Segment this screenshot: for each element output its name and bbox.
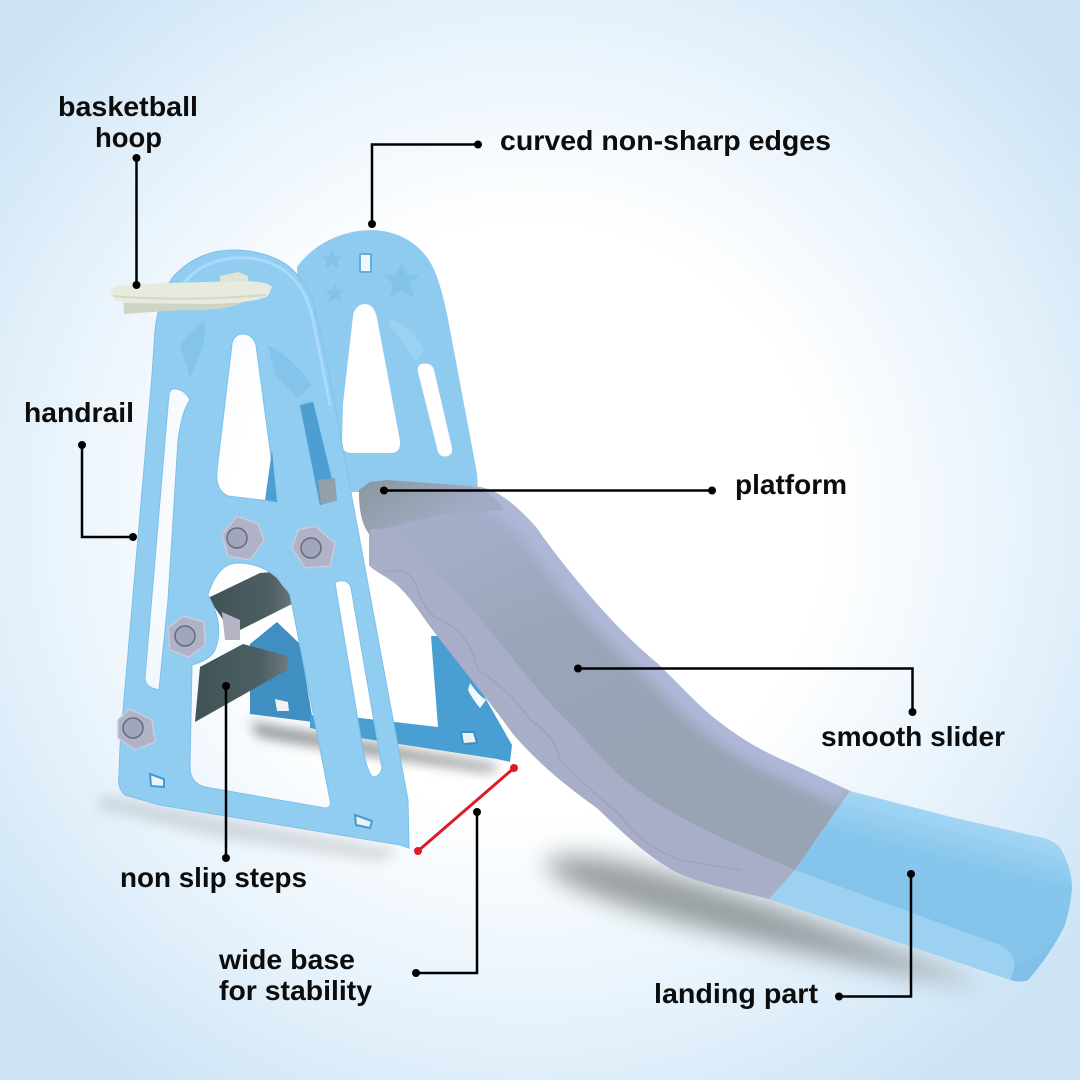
inner shading of the side window [388, 320, 425, 362]
callout: smooth slider [574, 664, 1005, 752]
slider [359, 480, 850, 899]
front frame [119, 250, 409, 848]
callout: wide base for stability: for stability [219, 975, 372, 1006]
foot holes [150, 774, 164, 787]
callout: handrail: handrail [24, 397, 134, 428]
back frame [297, 230, 478, 492]
callout: platform [380, 469, 847, 500]
frame highlight [173, 258, 330, 405]
callout: wide base for stability: wide base [218, 944, 355, 975]
callout: basketball hoop: hoop [95, 122, 162, 153]
callout: non slip steps: non slip steps [120, 862, 307, 893]
callout: non slip steps [120, 682, 307, 893]
callout: basketball hoop [58, 91, 198, 289]
platform top [359, 480, 505, 534]
slider side lip [369, 529, 795, 899]
callout: wide base for stability [218, 808, 481, 1006]
basketball hoop [110, 272, 272, 314]
ground shadows [95, 722, 985, 985]
light upper band of the channel [480, 487, 850, 791]
arched window through-view [300, 402, 337, 505]
slider channel [359, 480, 850, 899]
slide product illustration [110, 230, 1072, 982]
bolts [118, 516, 335, 750]
callout: platform: platform [735, 469, 847, 500]
callout: landing part: landing part [654, 978, 818, 1009]
callout: handrail [24, 397, 137, 541]
callout: smooth slider: smooth slider [821, 721, 1005, 752]
star embossing [322, 250, 419, 303]
callout: basketball hoop: basketball [58, 91, 198, 122]
wavy embossed line [385, 570, 740, 870]
callout: curved non-sharp edges: curved non-sharp edges [500, 125, 831, 156]
back frame lower legs [250, 622, 512, 762]
non slip steps [195, 572, 296, 722]
callout: landing part [654, 870, 915, 1009]
red base marker [414, 764, 518, 855]
callout: curved non-sharp edges [368, 125, 831, 228]
square hole [360, 254, 371, 272]
landing part [769, 791, 1072, 982]
